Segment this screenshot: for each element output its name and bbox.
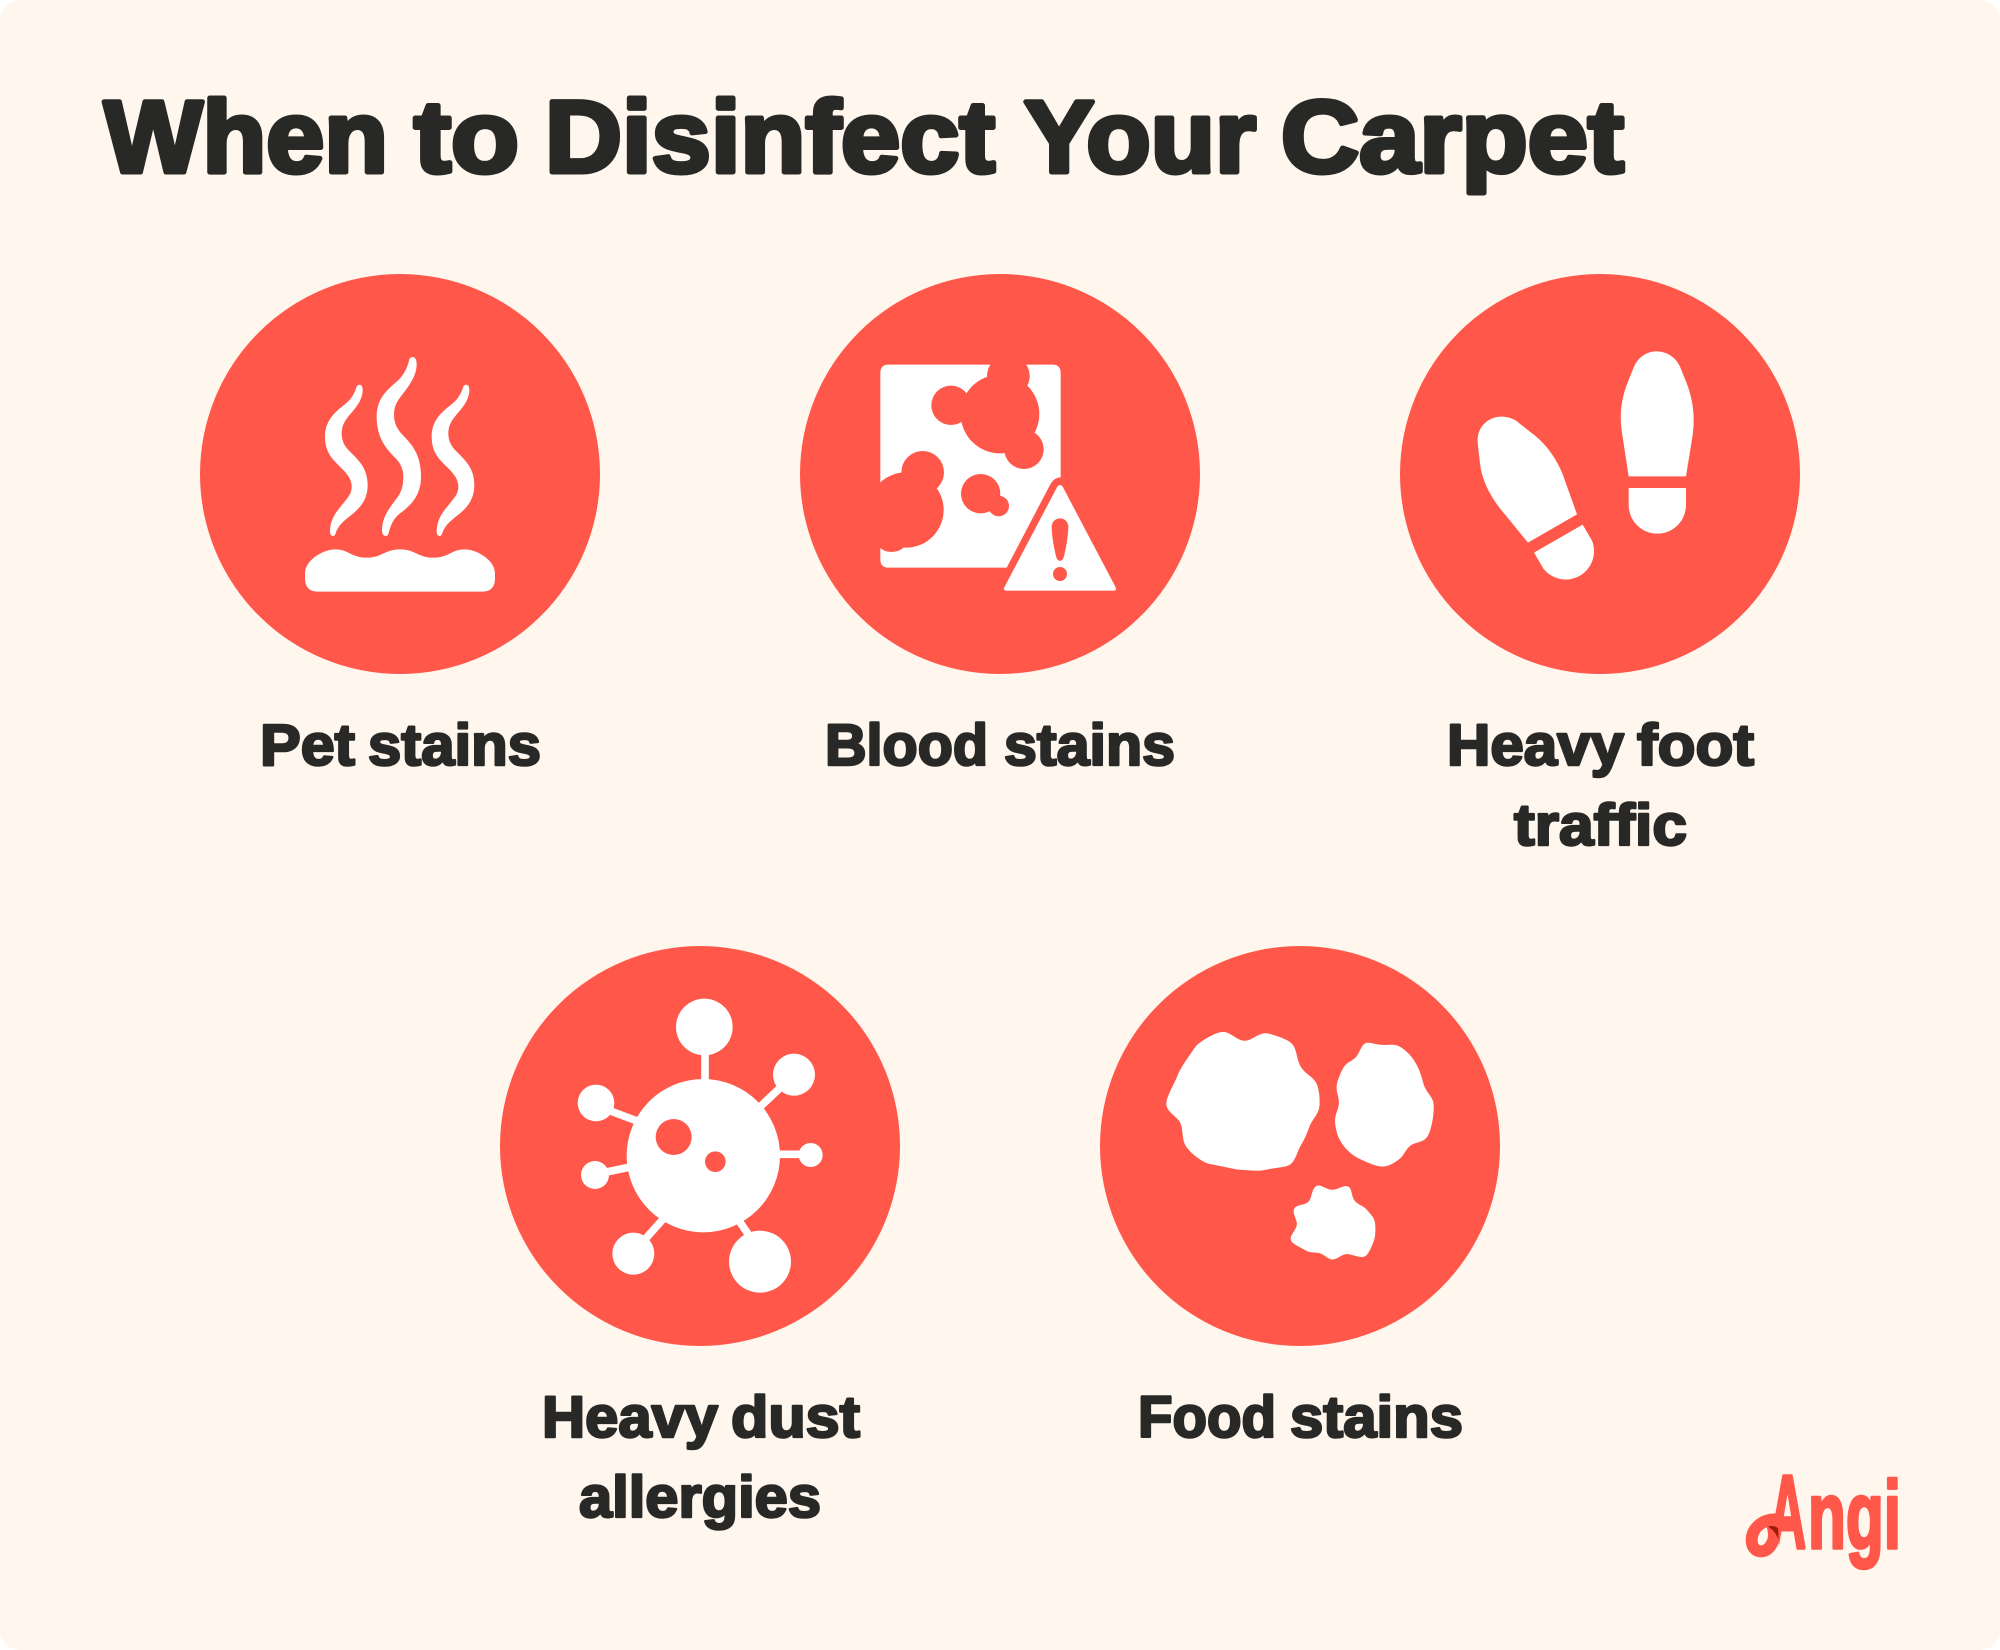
icon: food stain blobs <box>1100 946 1500 1346</box>
icon: shoe prints <box>1400 274 1800 674</box>
label: blood stains: stains <box>1004 713 1175 778</box>
title: Disinfect <box>545 80 995 194</box>
logo: Angi: A <box>1769 1455 1806 1571</box>
title: to <box>414 80 519 194</box>
label: blood stains <box>825 713 1175 778</box>
label: heavy foot traffic: traffic <box>1514 793 1687 858</box>
label: heavy foot traffic <box>1447 713 1754 858</box>
title <box>104 80 1624 194</box>
label: blood stains: Blood <box>825 713 988 778</box>
label: pet stains: stains <box>368 713 541 778</box>
panel: heavy dust allergies <box>500 946 900 1530</box>
icon: allergen particle <box>500 946 900 1346</box>
title: When <box>104 80 388 194</box>
label: heavy dust allergies: Heavy <box>542 1385 718 1450</box>
label: food stains <box>1138 1385 1463 1450</box>
panel: pet stains <box>200 274 600 778</box>
panel: food stains <box>1100 946 1500 1450</box>
panel: blood stains <box>800 274 1200 778</box>
logo: Angi: ngi <box>1808 1462 1901 1569</box>
label: heavy dust allergies: allergies <box>579 1465 821 1530</box>
label: food stains: Food <box>1138 1385 1276 1450</box>
label: food stains: stains <box>1290 1385 1463 1450</box>
title: Your <box>1024 80 1256 194</box>
label: heavy foot traffic: Heavy <box>1447 713 1624 778</box>
panel: heavy foot traffic <box>1400 274 1800 858</box>
label: pet stains: Pet <box>260 713 355 778</box>
label: heavy dust allergies <box>542 1385 860 1530</box>
label: heavy dust allergies: dust <box>731 1385 860 1450</box>
icon: stained carpet with warning triangle <box>800 274 1200 674</box>
logo: Angi <box>1752 1455 1901 1571</box>
icon: steam rising from pet stain <box>200 274 600 674</box>
label: heavy foot traffic: foot <box>1637 713 1754 778</box>
title: Carpet <box>1281 80 1624 194</box>
label: pet stains <box>260 713 541 778</box>
